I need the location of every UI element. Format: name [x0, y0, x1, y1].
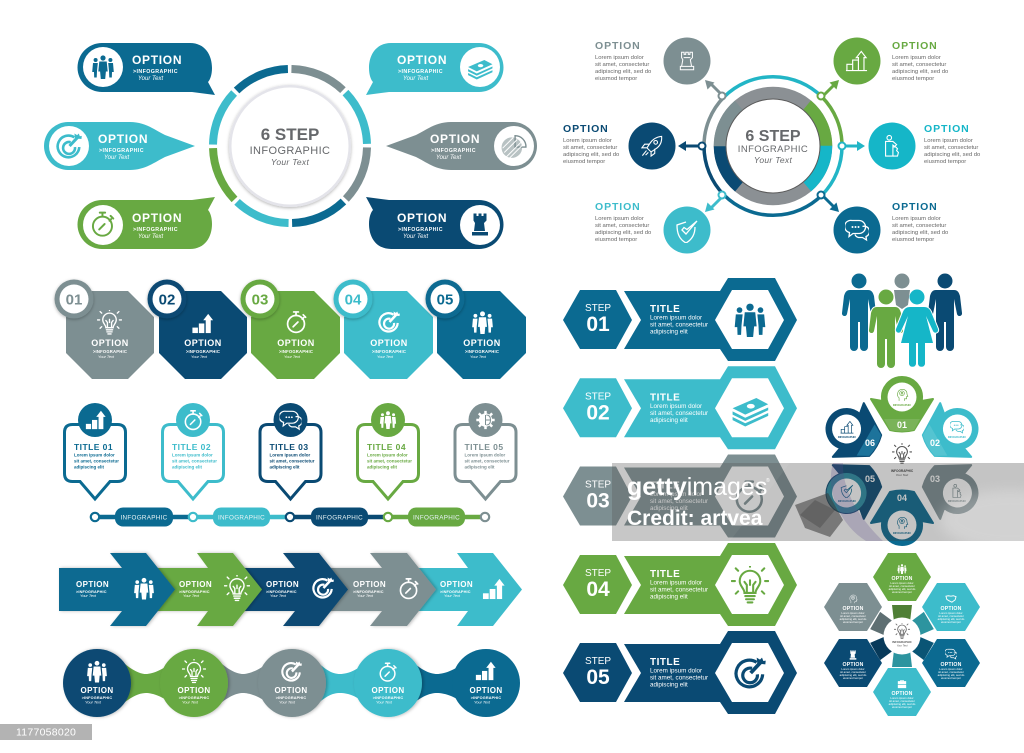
- hexagon: bottom right: [922, 639, 980, 687]
- step 01: adipiscing elit: [650, 328, 688, 336]
- callout 05: [455, 403, 516, 499]
- arrow 3: OPTION: [266, 580, 299, 589]
- octagon 04: OPTION: [370, 338, 408, 348]
- option text: top left: Lorem ipsum dolor: [595, 55, 644, 61]
- step 04: 04: [586, 578, 610, 601]
- lobe 02: [912, 392, 990, 473]
- panel: hexagon cluster: [824, 553, 980, 716]
- octagon 01: [54, 280, 154, 379]
- step 02: 02: [586, 401, 610, 424]
- octagon 02: 02: [159, 292, 175, 308]
- lobe 04: [871, 490, 933, 545]
- octagon 05: >INFOGRAPHIC: [465, 349, 499, 354]
- hexagon: bottom: adipiscing elit, sed do: [889, 702, 916, 706]
- callout 01: Lorem ipsum dolor: [74, 452, 115, 458]
- octagon 03: 03: [252, 292, 268, 308]
- ring nodes: [698, 92, 846, 198]
- hexagon: bottom left: [824, 639, 882, 687]
- bubble: top right: [366, 43, 503, 95]
- connectors: [115, 655, 472, 711]
- octagon 04: [334, 280, 433, 379]
- lobe numbers: [865, 420, 940, 503]
- option text: top right: [892, 40, 949, 82]
- option text: bottom right: Lorem ipsum dolor: [892, 216, 941, 222]
- octagon 04: >INFOGRAPHIC: [372, 349, 406, 354]
- circle 5: OPTION: [469, 686, 503, 695]
- circle 5: [452, 649, 520, 717]
- octagon 01: OPTION: [91, 338, 129, 348]
- bubble: top left: >INFOGRAPHIC: [133, 69, 178, 75]
- option text: top right: Lorem ipsum dolor: [892, 55, 941, 61]
- step 02: TITLE: [650, 392, 680, 403]
- bubble: bottom right: Your Text: [403, 234, 428, 240]
- watermark text: gettyimages: [627, 473, 767, 501]
- lobe 06: [814, 392, 892, 473]
- hexagon: bottom: sit amet, consectetur: [889, 699, 915, 703]
- option text: bottom right: OPTION: [892, 201, 938, 213]
- hexagon: top right: Lorem ipsum dolor: [939, 611, 963, 615]
- arrow 2: >INFOGRAPHIC: [179, 590, 210, 594]
- hub: [884, 618, 920, 654]
- hexagon: bottom right: sit amet, consectetur: [938, 670, 964, 674]
- circle 2: Your Text: [182, 700, 199, 704]
- lobe icons: INFOGRAPHIC: [893, 531, 911, 535]
- hexagon: top left: [824, 583, 882, 631]
- callout 02: Lorem ipsum dolor: [172, 452, 213, 458]
- circle 2: [160, 649, 228, 717]
- circle 5: Your Text: [474, 700, 491, 704]
- option text: left: OPTION: [563, 123, 609, 135]
- option text: bottom left: sit amet, consectetur: [595, 223, 649, 229]
- hexagon: top right: eiusmod tempor: [941, 620, 961, 624]
- icon circles: [628, 38, 916, 254]
- arrow 1: >INFOGRAPHIC: [76, 590, 107, 594]
- arrow 3: >INFOGRAPHIC: [266, 590, 297, 594]
- circle 4: [354, 649, 422, 717]
- step 01: [563, 278, 797, 361]
- bubble: top left: OPTION: [132, 53, 182, 67]
- hexagon: bottom left: Lorem ipsum dolor: [841, 667, 865, 671]
- option text: top left: sit amet, consectetur: [595, 62, 649, 68]
- hub: Your Text: [897, 644, 908, 648]
- step 03: Lorem ipsum dolor: [650, 491, 702, 498]
- step 01: TITLE: [650, 304, 680, 315]
- inner title: INFOGRAPHIC: [738, 144, 808, 155]
- lobe 01: [871, 377, 933, 432]
- step 04: TITLE: [650, 569, 680, 580]
- step 02: STEP: [585, 391, 611, 402]
- option text: left: adipiscing elit, sed do: [563, 152, 620, 158]
- lobe numbers: 03: [930, 474, 940, 484]
- circle 3: Your Text: [279, 700, 296, 704]
- circle 4: >INFOGRAPHIC: [373, 696, 403, 700]
- step 05: Lorem ipsum dolor: [650, 668, 702, 674]
- panel: 6 step ring with speech bubbles: [44, 37, 537, 255]
- step 04: Lorem ipsum dolor: [650, 580, 702, 586]
- option text: bottom left: adipiscing elit, sed do: [595, 230, 652, 236]
- callout 04: Lorem ipsum dolor: [367, 452, 408, 458]
- circle 5: >INFOGRAPHIC: [471, 696, 501, 700]
- arrow 2: Your Text: [183, 594, 200, 598]
- option text: right: sit amet, consectetur: [924, 145, 978, 151]
- panel: title callouts with timeline: [64, 403, 516, 526]
- option text: bottom right: [892, 201, 949, 243]
- octagon 02: [148, 280, 247, 379]
- option text: top left: adipiscing elit, sed do: [595, 69, 652, 75]
- octagon 02: OPTION: [184, 338, 222, 348]
- hexagon: top left: adipiscing elit, sed do: [840, 617, 867, 621]
- center circle title: 6 STEP: [261, 125, 319, 144]
- arrow 4: >INFOGRAPHIC: [353, 590, 384, 594]
- circle 1: OPTION: [80, 686, 114, 695]
- inner title: [726, 99, 820, 193]
- inner ring: [698, 71, 848, 221]
- option text: right: eiusmod tempor: [924, 159, 966, 165]
- callout 03: Lorem ipsum dolor: [270, 452, 311, 458]
- option text: left: Lorem ipsum dolor: [563, 138, 612, 144]
- segmented ring: [181, 37, 399, 255]
- callout 04: TITLE 04: [367, 442, 406, 452]
- callout 01: [64, 403, 126, 499]
- step 01: 01: [586, 313, 610, 336]
- option text: right: adipiscing elit, sed do: [924, 152, 981, 158]
- bubble: middle left: Your Text: [104, 155, 129, 161]
- callout 04: sit amet, consectetur: [367, 458, 412, 464]
- lobe numbers: 01: [897, 420, 907, 430]
- bubble: middle left: [44, 122, 195, 170]
- step 05: sit amet, consectetur: [650, 674, 708, 682]
- option text: bottom left: Lorem ipsum dolor: [595, 216, 644, 222]
- circle 3: >INFOGRAPHIC: [276, 696, 306, 700]
- lobe numbers: 05: [865, 474, 875, 484]
- octagon 02: Your Text: [191, 355, 208, 359]
- hexagon: top right: [922, 583, 980, 631]
- panel: octagon steps: [54, 280, 526, 379]
- option text: bottom right: sit amet, consectetur: [892, 223, 946, 229]
- bubble: middle right: >INFOGRAPHIC: [431, 148, 476, 154]
- bubble: bottom left: >INFOGRAPHIC: [133, 227, 178, 233]
- hexagon: bottom left: eiusmod tempor: [843, 676, 863, 680]
- step 03: [563, 454, 797, 538]
- callout 03: [260, 403, 321, 499]
- step 04: STEP: [585, 568, 611, 579]
- octagon 03: OPTION: [277, 338, 315, 348]
- arrow 5: OPTION: [440, 580, 473, 589]
- step 05: STEP: [585, 656, 611, 667]
- bubble: bottom right: OPTION: [397, 211, 447, 225]
- lobe icons: INFOGRAPHIC: [948, 435, 966, 439]
- hub bulb: [891, 444, 914, 477]
- option text: bottom right: eiusmod tempor: [892, 237, 934, 243]
- arrow 1: Your Text: [80, 594, 97, 598]
- option text: left: [563, 123, 620, 165]
- option text: right: [924, 123, 981, 165]
- hexagon: top right: OPTION: [940, 606, 962, 612]
- lobe icons: INFOGRAPHIC: [893, 403, 911, 407]
- circle 1: [63, 649, 131, 717]
- octagon 01: >INFOGRAPHIC: [93, 349, 127, 354]
- timeline: INFOGRAPHIC: [316, 514, 363, 522]
- hexagon: bottom left: adipiscing elit, sed do: [840, 673, 867, 677]
- octagon 01: 01: [66, 292, 82, 308]
- circle 2: OPTION: [177, 686, 211, 695]
- lobe icons: INFOGRAPHIC: [948, 499, 966, 503]
- option text: top right: OPTION: [892, 40, 938, 52]
- step 05: 05: [586, 666, 610, 689]
- hexagon: bottom: Lorem ipsum dolor: [890, 696, 914, 700]
- callout 03: adipiscing elit: [270, 464, 300, 470]
- arrow 4: OPTION: [353, 580, 386, 589]
- icon: group of people: [842, 274, 962, 368]
- inner title: 6 STEP: [745, 128, 801, 145]
- hexagon: bottom: eiusmod tempor: [892, 705, 912, 709]
- hexagon: top: [873, 553, 931, 601]
- hub bulb: Your Text: [896, 473, 908, 477]
- hexagon: top right: sit amet, consectetur: [938, 614, 964, 618]
- hub bulb: INFOGRAPHIC: [891, 469, 914, 473]
- bubble: top left: Your Text: [138, 76, 163, 82]
- lobe 03: [912, 449, 990, 530]
- arrow 5: Your Text: [444, 594, 461, 598]
- panel: chained arrows: [59, 553, 522, 626]
- circle 4: Your Text: [376, 700, 393, 704]
- step 02: [563, 366, 797, 449]
- circle 1: >INFOGRAPHIC: [82, 696, 112, 700]
- panel: step rows: [563, 278, 797, 714]
- image id label: 1177058020: [16, 726, 76, 738]
- callout 05: adipiscing elit: [464, 464, 495, 470]
- callout 01: TITLE 01: [74, 442, 113, 452]
- step 05: TITLE: [650, 657, 680, 668]
- circle 1: Your Text: [85, 700, 102, 704]
- step 05: adipiscing elit: [650, 682, 688, 688]
- circle 3: [258, 649, 326, 717]
- step 04: sit amet, consectetur: [650, 586, 708, 594]
- callout 01: sit amet, consectetur: [74, 458, 119, 464]
- panel: cycle diagram with six lobes: [814, 377, 990, 545]
- callout 05: TITLE 05: [464, 442, 504, 452]
- hub: INFOGRAPHIC: [892, 640, 912, 644]
- arrow 5: [400, 553, 522, 626]
- octagon 01: Your Text: [98, 355, 115, 359]
- hexagon: bottom right: Lorem ipsum dolor: [939, 667, 963, 671]
- callout 04: adipiscing elit: [367, 464, 398, 470]
- option text: top right: adipiscing elit, sed do: [892, 69, 949, 75]
- callout 05: Lorem ipsum dolor: [464, 452, 506, 458]
- octagon 03: Your Text: [284, 355, 301, 359]
- arrow 1: OPTION: [76, 580, 109, 589]
- bubble: bottom left: OPTION: [132, 211, 182, 225]
- watermark text: ®: [766, 477, 770, 484]
- hexagon: bottom left: sit amet, consectetur: [840, 670, 866, 674]
- step 02: sit amet, consectetur: [650, 410, 708, 417]
- option text: left: eiusmod tempor: [563, 159, 605, 165]
- timeline: INFOGRAPHIC: [120, 514, 168, 522]
- step 03: 03: [586, 490, 610, 512]
- arrow 1: [59, 553, 175, 626]
- bubble: bottom right: [366, 197, 503, 249]
- callout 05: sit amet, consectetur: [464, 458, 510, 464]
- lobe icons: [838, 389, 966, 535]
- hexagon: top: OPTION: [891, 576, 913, 582]
- center circle title: INFOGRAPHIC: [250, 145, 330, 157]
- hexagon: top left: eiusmod tempor: [843, 620, 863, 624]
- callout 02: sit amet, consectetur: [172, 458, 217, 464]
- hexagon: top: adipiscing elit, sed do: [889, 587, 916, 591]
- callout 01: adipiscing elit: [74, 464, 105, 470]
- callout 03: TITLE 03: [270, 442, 309, 452]
- lobe numbers: 02: [930, 438, 940, 448]
- hexagon: top right: adipiscing elit, sed do: [938, 617, 965, 621]
- hexagon: top: Lorem ipsum dolor: [890, 581, 914, 585]
- arrow 2: [140, 553, 262, 626]
- bubble: top right: OPTION: [397, 53, 447, 67]
- step 01: Lorem ipsum dolor: [650, 314, 702, 322]
- bubble: middle left: OPTION: [98, 132, 148, 146]
- lobe 05: [814, 449, 892, 530]
- arrow 4: [315, 553, 436, 626]
- option text: top left: [595, 40, 652, 82]
- bubble: bottom left: [78, 197, 215, 249]
- octagon 05: OPTION: [463, 338, 501, 348]
- watermark band: [612, 463, 1024, 550]
- callout 03: sit amet, consectetur: [270, 458, 315, 464]
- timeline: INFOGRAPHIC: [413, 514, 460, 522]
- lobe icons: INFOGRAPHIC: [838, 499, 856, 503]
- arrow 5: >INFOGRAPHIC: [440, 590, 471, 594]
- octagon 05: 05: [437, 292, 453, 308]
- step 03: adipiscing elit: [650, 505, 688, 512]
- step 01: sit amet, consectetur: [650, 322, 708, 328]
- step 02: Lorem ipsum dolor: [650, 403, 702, 410]
- arrows to icons: [678, 80, 865, 212]
- circle 4: OPTION: [371, 686, 405, 695]
- arrow 2: OPTION: [179, 580, 212, 589]
- option text: left: sit amet, consectetur: [563, 145, 617, 151]
- hexagon: top left: Lorem ipsum dolor: [841, 611, 865, 615]
- circle 3: OPTION: [274, 686, 308, 695]
- step 05: [563, 631, 797, 714]
- hexagon: bottom: OPTION: [891, 691, 913, 697]
- bubble: top right: Your Text: [403, 76, 428, 82]
- callout 04: [358, 403, 418, 499]
- arrow 3: [225, 553, 348, 626]
- hexagon: bottom right: eiusmod tempor: [941, 676, 961, 680]
- bubble: bottom left: Your Text: [138, 234, 163, 240]
- timeline: INFOGRAPHIC: [218, 514, 265, 522]
- callout 02: TITLE 02: [172, 442, 211, 452]
- option text: top right: sit amet, consectetur: [892, 62, 946, 68]
- step 04: [563, 543, 797, 626]
- watermark text: Credit: artvea: [627, 507, 763, 530]
- octagon 04: 04: [345, 292, 362, 308]
- panel: 6 step ring with arrows: [563, 38, 981, 254]
- bubble: middle right: Your Text: [436, 155, 461, 161]
- center circle title: Your Text: [271, 157, 309, 167]
- option text: top right: eiusmod tempor: [892, 76, 934, 82]
- step 03: sit amet, consectetur: [650, 498, 708, 505]
- panel: connected circles: [63, 649, 520, 717]
- option text: bottom left: eiusmod tempor: [595, 237, 637, 243]
- option text: top left: OPTION: [595, 40, 641, 52]
- option text: bottom left: OPTION: [595, 201, 641, 213]
- step 03: STEP: [585, 480, 611, 490]
- center circle title: [229, 85, 351, 207]
- lobe numbers: 04: [897, 493, 907, 503]
- bubble: bottom right: >INFOGRAPHIC: [398, 227, 443, 233]
- connectors: [870, 605, 934, 667]
- option text: bottom right: adipiscing elit, sed do: [892, 230, 949, 236]
- octagon 03: >INFOGRAPHIC: [279, 349, 313, 354]
- callout 02: [162, 403, 224, 499]
- bubble: middle right: OPTION: [430, 132, 480, 146]
- option text: right: Lorem ipsum dolor: [924, 138, 973, 144]
- callout 02: adipiscing elit: [172, 464, 203, 470]
- watermark text: [627, 473, 770, 530]
- hexagon: bottom right: adipiscing elit, sed do: [938, 673, 965, 677]
- timeline: [91, 508, 489, 526]
- arrow 3: Your Text: [270, 594, 287, 598]
- bubble: top left: [78, 43, 215, 95]
- arrow 4: Your Text: [357, 594, 374, 598]
- step 01: STEP: [585, 303, 611, 314]
- hexagon: bottom: [873, 668, 931, 716]
- lobe numbers: 06: [865, 438, 875, 448]
- bubble: middle left: >INFOGRAPHIC: [99, 148, 144, 154]
- outer ring arcs: [704, 77, 842, 215]
- step 03: TITLE: [650, 480, 680, 492]
- option text: bottom left: [595, 201, 652, 243]
- octagon 03: [240, 280, 340, 379]
- hexagon: top: eiusmod tempor: [892, 590, 912, 594]
- hexagon: bottom right: OPTION: [940, 662, 962, 668]
- circle 2: >INFOGRAPHIC: [179, 696, 209, 700]
- hexagon: top left: OPTION: [842, 606, 864, 612]
- image id label: [0, 724, 92, 740]
- lobe icons: INFOGRAPHIC: [838, 435, 856, 439]
- inner title: Your Text: [754, 155, 792, 165]
- octagon 05: Your Text: [470, 355, 487, 359]
- option text: top left: eiusmod tempor: [595, 76, 637, 82]
- hexagon: bottom left: OPTION: [842, 662, 864, 668]
- hexagon: top left: sit amet, consectetur: [840, 614, 866, 618]
- option text: right: OPTION: [924, 123, 970, 135]
- hexagon: top: sit amet, consectetur: [889, 584, 915, 588]
- bubble: top right: >INFOGRAPHIC: [398, 69, 443, 75]
- step 04: adipiscing elit: [650, 594, 688, 600]
- step 02: adipiscing elit: [650, 417, 688, 424]
- octagon 02: >INFOGRAPHIC: [186, 349, 220, 354]
- octagon 04: Your Text: [377, 355, 394, 359]
- bubble: middle right: [386, 122, 537, 170]
- octagon 05: [426, 280, 526, 379]
